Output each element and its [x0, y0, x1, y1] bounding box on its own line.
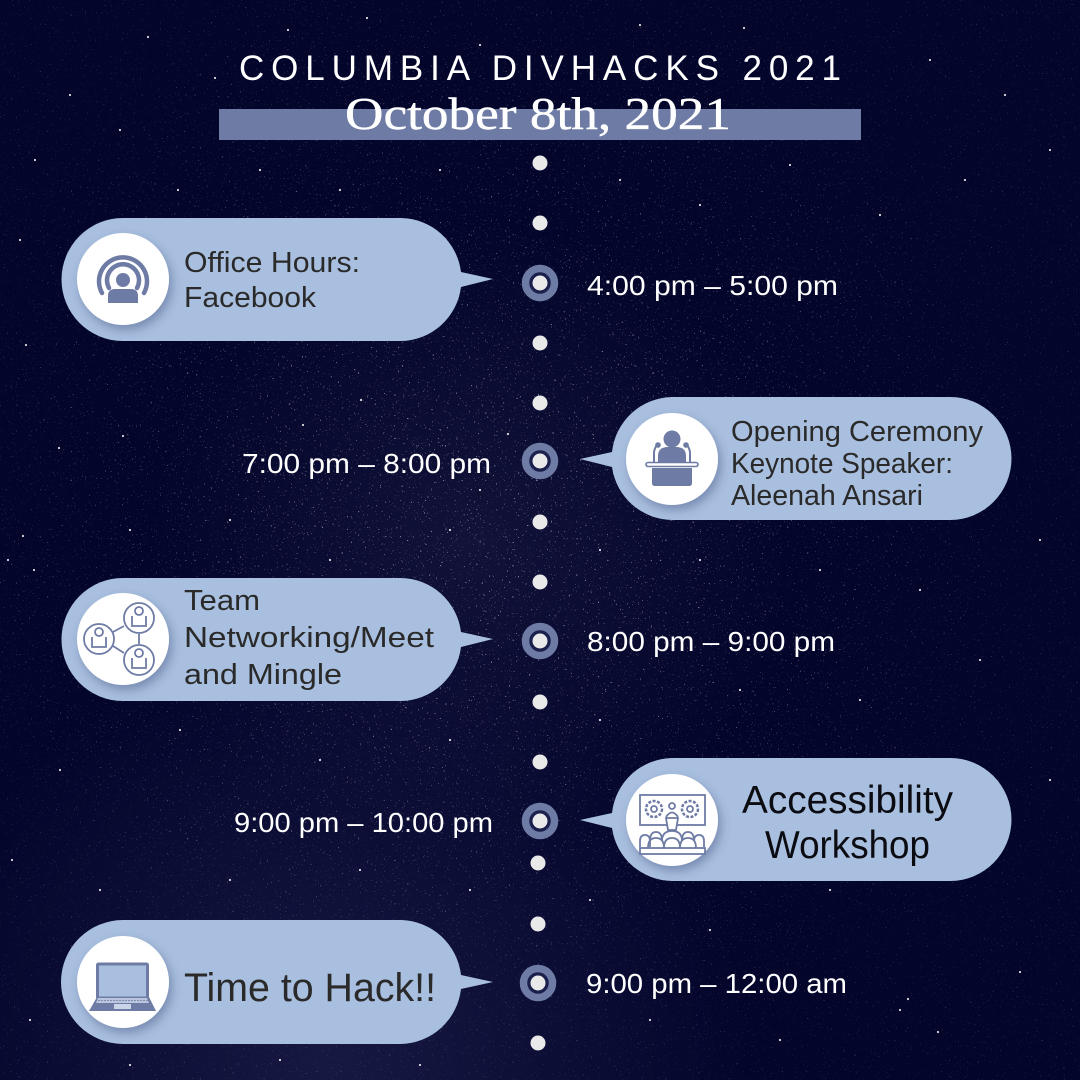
- label: accessibility workshop: Accessibility: [742, 779, 953, 822]
- icon: laptop: [77, 936, 169, 1028]
- label: office hours: Facebook: [184, 282, 317, 314]
- event 5: time to hack: [61, 920, 493, 1044]
- label: opening ceremony: Keynote Speaker:: [731, 448, 953, 480]
- timeline node 4: [526, 806, 554, 836]
- label: team networking: and Mingle: [184, 659, 342, 691]
- time 5: 9:00 pm – 12:00 am: [586, 968, 847, 999]
- label: opening ceremony: Opening Ceremony: [731, 416, 983, 448]
- icon: workshop audience: [626, 774, 718, 866]
- time 3: 8:00 pm – 9:00 pm: [587, 626, 835, 657]
- icon: network of people: [77, 593, 169, 685]
- bubble: office hours: [61, 218, 493, 341]
- date banner: [219, 109, 861, 140]
- bubble: time to hack: [61, 920, 493, 1044]
- event 4: accessibility workshop: [580, 758, 1012, 881]
- timeline node 2: [526, 446, 554, 476]
- time 1: 4:00 pm – 5:00 pm: [587, 270, 838, 301]
- label: accessibility workshop: Workshop: [765, 824, 930, 867]
- timeline node 5: [524, 968, 552, 998]
- icon: podium speaker: [626, 413, 718, 505]
- label: time to hack: Time to Hack!!: [184, 966, 436, 1010]
- label: team networking: Networking/Meet: [184, 622, 434, 654]
- bubble: team networking: [61, 578, 493, 701]
- label: office hours: Office Hours:: [184, 247, 360, 279]
- timeline node 1: [526, 268, 554, 298]
- event 1: office hours: [61, 218, 493, 341]
- date heading: October 8th, 2021: [345, 89, 731, 139]
- bubble: accessibility workshop: [580, 758, 1012, 881]
- bubble: opening ceremony: [580, 397, 1012, 520]
- event 3: team networking: [61, 578, 493, 701]
- event 2: opening ceremony: [580, 397, 1012, 520]
- timeline node 3: [526, 626, 554, 656]
- label: team networking: Team: [184, 585, 260, 617]
- label: opening ceremony: Aleenah Ansari: [731, 480, 923, 512]
- timeline dots: [530, 156, 548, 1050]
- time 4: 9:00 pm – 10:00 pm: [234, 807, 493, 838]
- time 2: 7:00 pm – 8:00 pm: [242, 448, 491, 479]
- title: COLUMBIA DIVHACKS 2021: [239, 49, 841, 88]
- icon: broadcast person: [77, 233, 169, 325]
